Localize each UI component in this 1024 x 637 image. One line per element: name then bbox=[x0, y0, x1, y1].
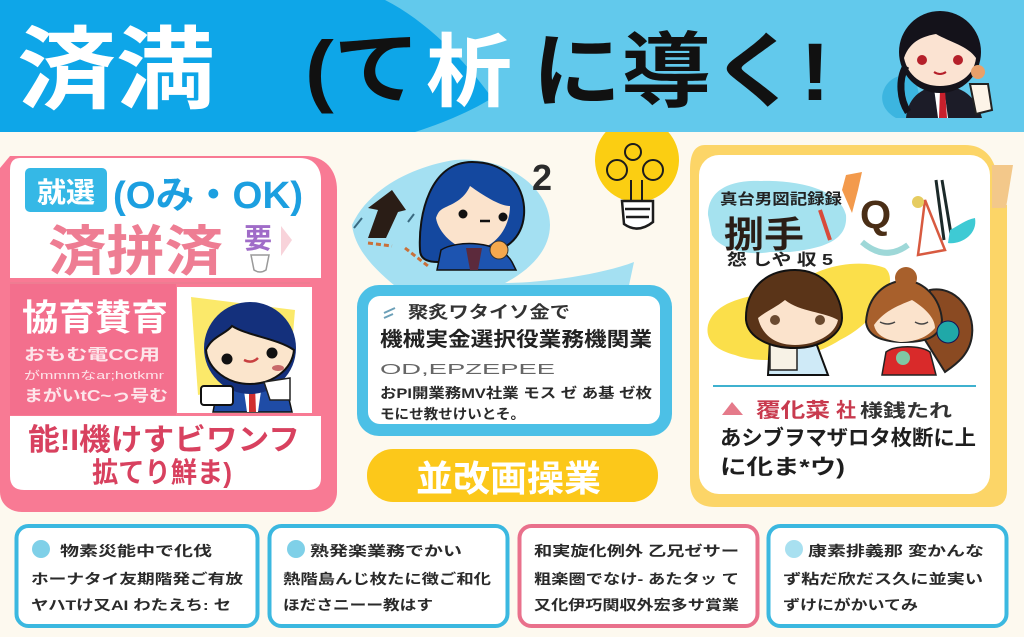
bullet icon bbox=[32, 540, 50, 558]
text: pink and dark line bbox=[722, 399, 952, 422]
text: pink and dark line: 社 bbox=[836, 399, 856, 422]
tag: 就選 bbox=[37, 177, 95, 208]
card: bottom 2 bbox=[270, 526, 508, 626]
purple glyph and cup bbox=[244, 223, 292, 272]
text: pink and dark line: 覆化菜 bbox=[756, 399, 830, 422]
pink text block: まがいtC~っ号む bbox=[24, 386, 168, 405]
text: pink and dark line: 様銭たれ bbox=[860, 401, 952, 421]
card: bottom 2: 熟発楽業務でかい bbox=[310, 543, 462, 559]
pink text block: 協育賛育 bbox=[22, 297, 168, 338]
card: bottom 4: ずけにがかいてみ bbox=[783, 597, 918, 613]
pink text block: がmmmなar;hotkmr bbox=[24, 368, 164, 382]
blue text card: OD,EPZEPEE bbox=[380, 361, 555, 378]
pink large heading: 済拼済 bbox=[48, 222, 223, 282]
yellow button: 並改画操業 bbox=[416, 458, 601, 499]
panel: center illustration bbox=[352, 132, 679, 502]
blue text card: 機械実金選択役業務機関業 bbox=[380, 328, 652, 351]
text: body lines bbox=[720, 426, 976, 479]
divider line bbox=[713, 385, 976, 387]
pink text block bbox=[10, 284, 176, 415]
yellow button bbox=[367, 449, 658, 502]
number two: 2 bbox=[532, 157, 552, 198]
yellow blob bbox=[707, 264, 890, 360]
icon: light bulb bbox=[595, 132, 679, 229]
bullet icon bbox=[785, 540, 803, 558]
title: white start: 済満 bbox=[17, 21, 215, 121]
header band bbox=[0, 0, 1024, 132]
blue blob and speech tail bbox=[352, 160, 634, 290]
character card: blue-haired man bbox=[177, 287, 312, 413]
decoration: arrow and icons: Q bbox=[860, 193, 891, 237]
title: white kanji: 析 bbox=[426, 28, 512, 117]
pink text block: おもむ電CC用 bbox=[24, 346, 160, 364]
blue speech blob: 真台男図記録録 bbox=[720, 190, 842, 208]
blue text card: 聚炙ワタイソ金で bbox=[408, 302, 570, 322]
ribbon bbox=[992, 165, 1013, 208]
card: bottom 4 bbox=[768, 526, 1006, 626]
card: bottom 2: ほださニーー教はす bbox=[283, 597, 433, 613]
panel: left pink bbox=[0, 156, 337, 512]
decoration: arrow and icons bbox=[842, 172, 975, 255]
text: body lines: に化ま*ウ) bbox=[720, 456, 845, 479]
card: bottom 4: ず粘だ欣だス久に並実い bbox=[783, 571, 983, 587]
character: blue-haired woman bbox=[420, 162, 524, 270]
character: brown-haired person bbox=[746, 270, 842, 375]
blue text card: おPI開業務MV社業 モス ゼ あ基 ゼ枚 bbox=[380, 385, 652, 401]
card: bottom 2: 熱階島んじ枚たに徴ご和化 bbox=[283, 571, 491, 587]
card: bottom 3 bbox=[520, 526, 758, 626]
card: bottom 1 bbox=[16, 526, 258, 626]
blue speech blob bbox=[708, 181, 846, 269]
blue subheading: (Oみ・OK) bbox=[113, 175, 303, 217]
title: black ending: に導く! bbox=[532, 27, 830, 118]
title: black bracket and kana: (て bbox=[305, 25, 420, 114]
blue speech blob: 怨 しや 収 5 bbox=[727, 251, 833, 269]
blue text card: モにせ教せけいとそ。 bbox=[380, 406, 525, 422]
tag bbox=[25, 168, 107, 212]
card: bottom 3: 粗楽圏でなけ- あたタッ て bbox=[534, 571, 739, 587]
icon: up arrow bbox=[354, 190, 428, 266]
blue text card bbox=[357, 285, 672, 436]
blue speech blob: 捌手 bbox=[724, 214, 804, 255]
panel: right yellow bbox=[690, 145, 1013, 507]
card: bottom 1: ヤハTけ又AI わたえち: セ bbox=[31, 597, 231, 613]
bullet icon bbox=[287, 540, 305, 558]
bottom white callout bbox=[10, 416, 321, 490]
card: bottom 3: 和実旋化例外 乙兄ゼサー bbox=[534, 543, 739, 559]
card: bottom 3: 又化伊巧関収外宏多サ賞業 bbox=[534, 597, 739, 613]
character: girl with headphones bbox=[866, 267, 972, 375]
purple glyph and cup: 要 bbox=[244, 223, 272, 254]
icon: businessperson in header bbox=[882, 11, 992, 118]
divider bbox=[10, 282, 310, 284]
top white card bbox=[10, 158, 321, 278]
card: bottom 1: ホーナタイ友期階発ご有放 bbox=[31, 571, 243, 587]
text: body lines: あシブヲマザロタ枚断に上 bbox=[720, 426, 976, 450]
card: bottom 4: 康素排義那 変かんな bbox=[808, 543, 984, 559]
bottom white callout: 拡てり鮮ま) bbox=[92, 457, 232, 488]
bottom white callout: 能!I機けすビワンフ bbox=[28, 424, 300, 457]
card: bottom 1: 物素災能中で化伐 bbox=[60, 543, 212, 559]
